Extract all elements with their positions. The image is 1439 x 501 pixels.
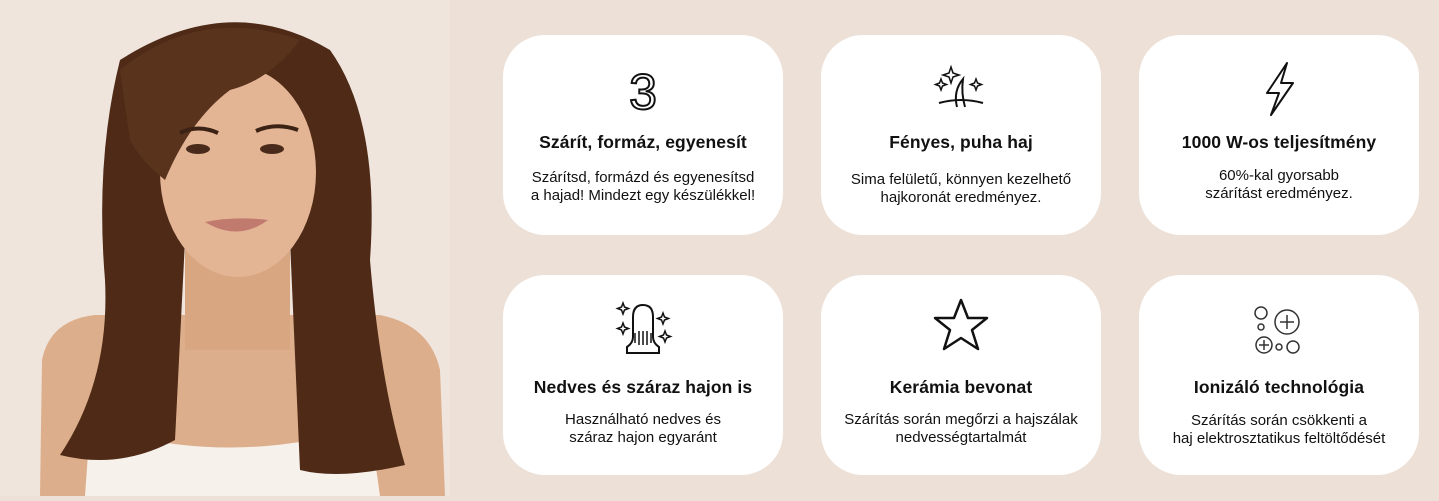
text: nedvességtartalmát (896, 429, 1026, 446)
text (1173, 412, 1386, 447)
text (844, 411, 1078, 446)
face (160, 67, 316, 277)
heading: Fényes, puha haj (889, 132, 1033, 152)
text: Szárítás során csökkenti a (1191, 412, 1367, 429)
top (85, 425, 380, 496)
text: Használható nedves és (565, 411, 721, 428)
text: haj elektrosztatikus feltöltődését (1173, 430, 1385, 447)
body skin (40, 315, 445, 496)
card: Nedves és száraz hajon is (503, 275, 783, 475)
text: száraz hajon egyaránt (569, 429, 717, 446)
heading: 1000 W-os teljesítmény (1182, 132, 1376, 152)
icon: ions (1254, 306, 1300, 354)
text (851, 171, 1071, 206)
bangs (120, 28, 300, 180)
heading: Kerámia bevonat (890, 377, 1032, 397)
heading: Szárít, formáz, egyenesít (539, 132, 747, 152)
text: szárítást eredményez. (1205, 185, 1353, 202)
icon: shiny hair (934, 64, 984, 108)
text: 60%-kal gyorsabb (1219, 167, 1339, 184)
text (531, 169, 755, 204)
card: Szárít, formáz, egyenesít (503, 35, 783, 235)
text: Szárítás során megőrzi a hajszálak (844, 411, 1078, 428)
icon: star (934, 298, 988, 350)
text: Szárítsd, formázd és egyenesítsd (532, 169, 754, 186)
card: 1000 W-os teljesítmény (1139, 35, 1419, 235)
hair back (60, 22, 405, 474)
photo: woman portrait (0, 0, 450, 496)
heading: Ionizáló technológia (1194, 377, 1364, 397)
icon: lightning (1266, 62, 1294, 116)
lips (205, 218, 268, 232)
icon: hair with sparkles (616, 301, 672, 354)
text: hajkoronát eredményez. (881, 189, 1041, 206)
eyes (186, 144, 210, 154)
card: Ionizáló technológia (1139, 275, 1419, 475)
heading: Nedves és száraz hajon is (534, 377, 752, 397)
text: Sima felületű, könnyen kezelhető (851, 171, 1071, 188)
text: a hajad! Mindezt egy készülékkel! (531, 187, 755, 204)
text (1205, 167, 1353, 202)
text (565, 411, 721, 446)
card: Fényes, puha haj (821, 35, 1101, 235)
card: Kerámia bevonat (821, 275, 1101, 475)
